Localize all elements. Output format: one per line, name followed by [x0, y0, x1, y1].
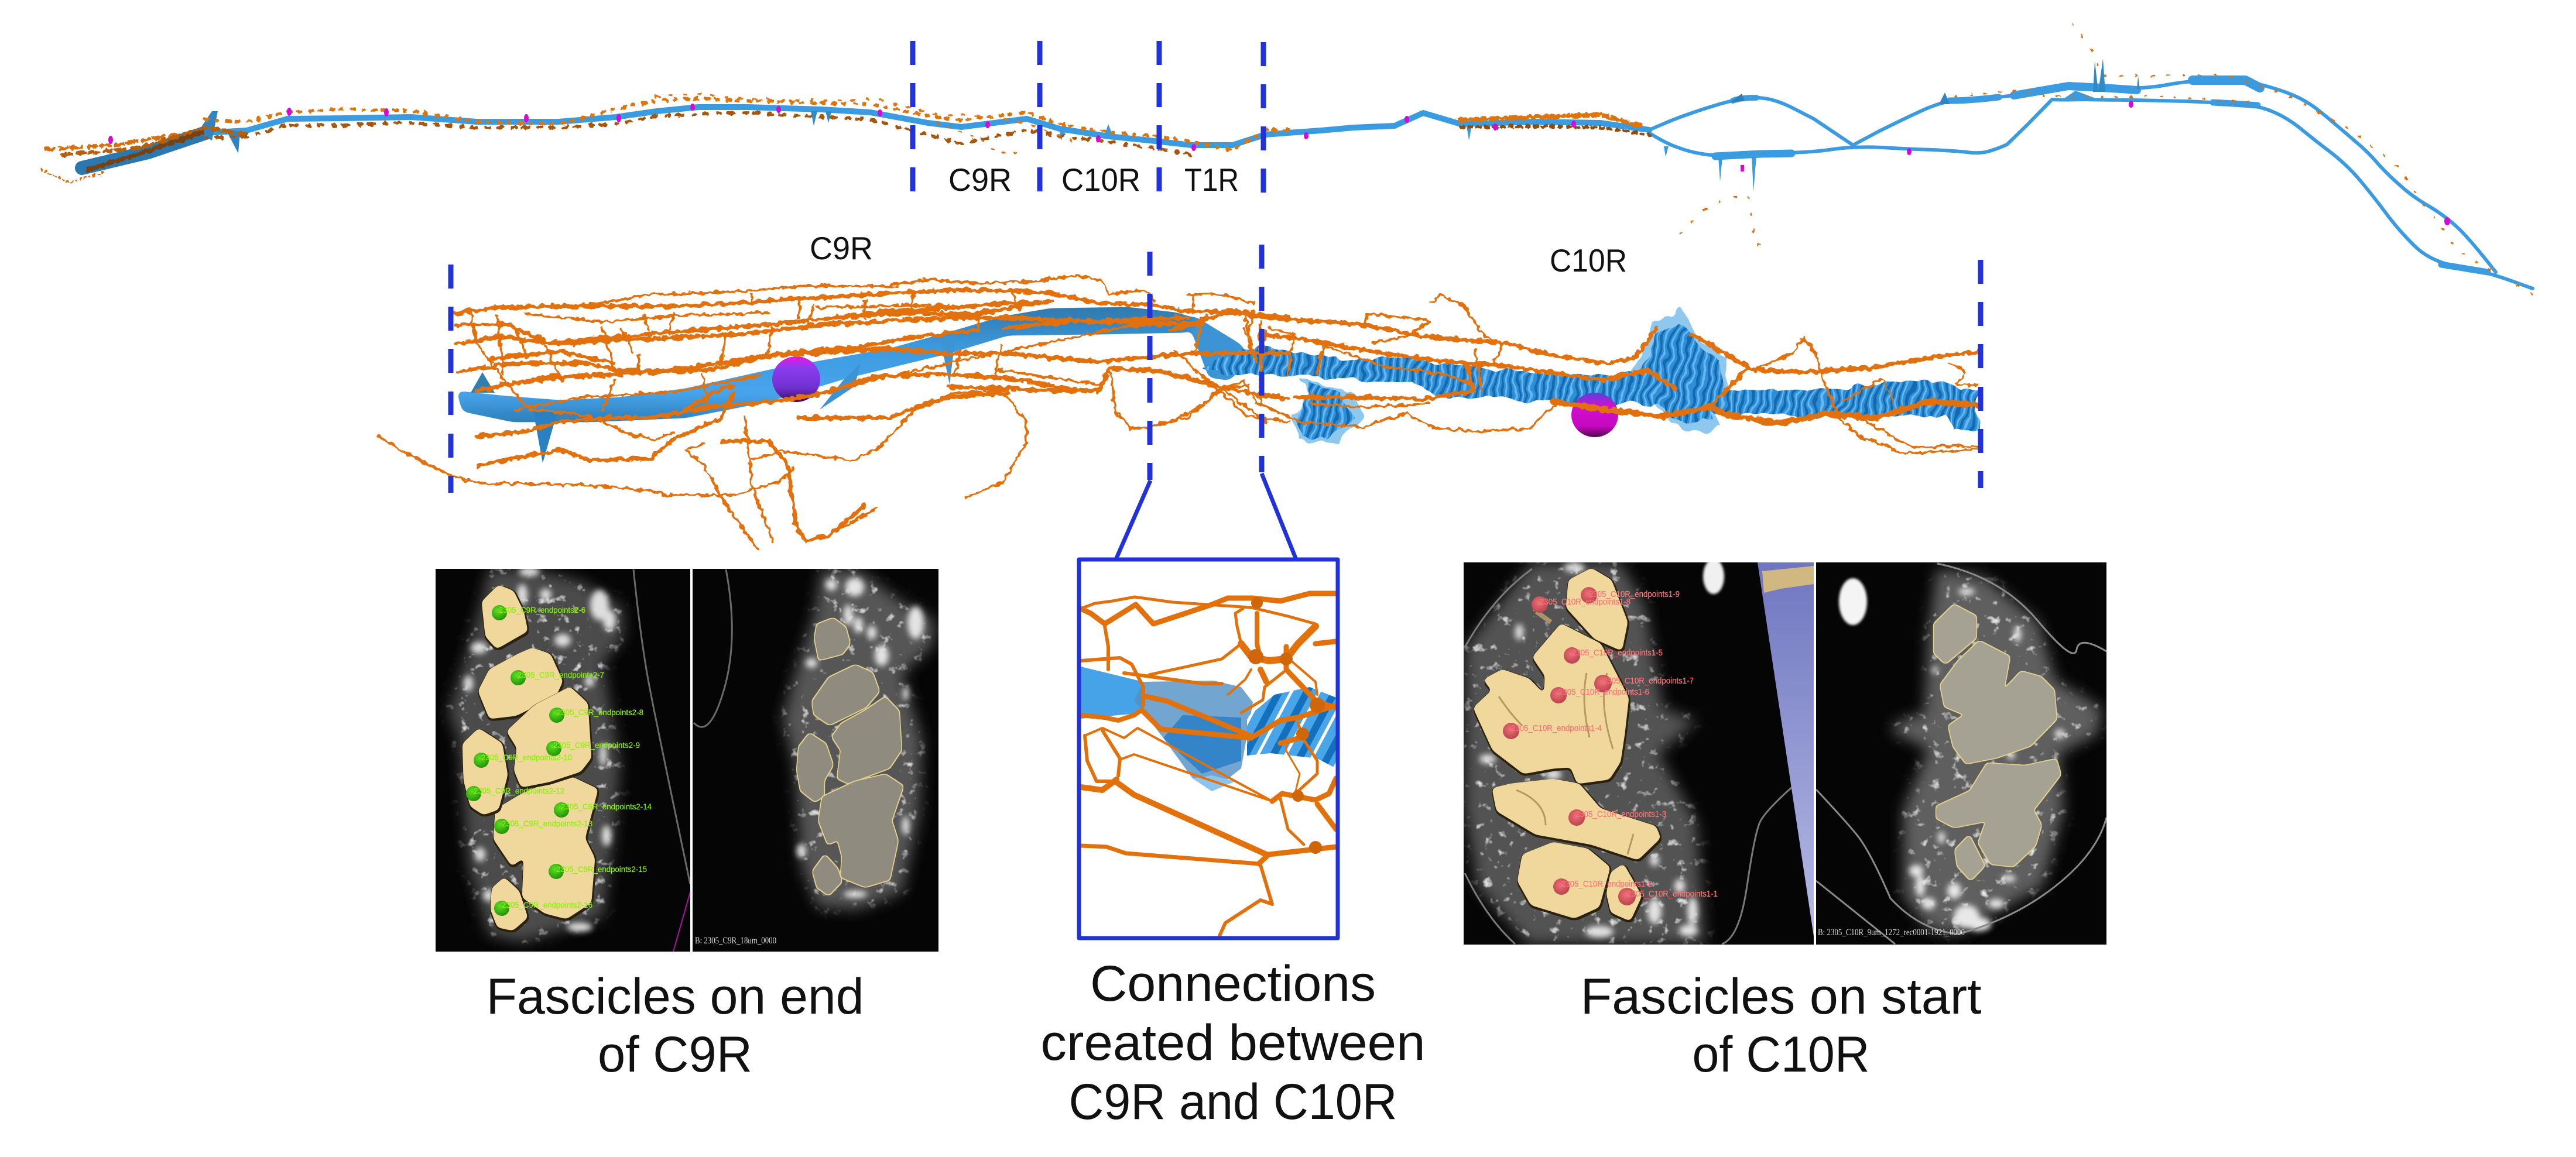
section labels: C10R [1061, 162, 1140, 198]
red endpoint spheres [1503, 587, 1636, 905]
endpoint labels: 2305_C9R_endpoints2-6 [499, 605, 585, 614]
green endpoint spheres [466, 605, 569, 916]
caption: Fascicles on start of C10R: Fascicles on start [1581, 969, 1982, 1025]
endpoint labels: 2305_C10R_endpoints1-6 [1558, 687, 1649, 697]
section labels: C9R [948, 162, 1012, 198]
section labels [948, 162, 1239, 198]
endpoint labels: 2305_C9R_endpoints2-14 [561, 802, 652, 811]
endpoint labels: 2305_C10R_endpoints1-8 [1540, 597, 1630, 607]
endpoint labels: 2305_C10R_endpoints1-2 [1561, 879, 1652, 889]
endpoint labels: 2305_C9R_endpoints2-15 [556, 864, 647, 874]
caption: connections created between C9R and C10R: Connections [1090, 956, 1376, 1012]
overview section boundary lines [913, 41, 1263, 193]
caption: Fascicles on start of C10R [1581, 969, 1982, 1083]
CT slice with C9R outlines [693, 569, 938, 952]
panel: full nerve overview [41, 23, 2535, 296]
caption: Fascicles on end of C9R [486, 969, 864, 1083]
label: C10R: C10R [1550, 242, 1627, 279]
slice caption: B: 2305_C9R_18um_0000 [695, 936, 776, 946]
C10R fascicle outlines [1935, 606, 2060, 879]
endpoint labels: 2305_C10R_endpoints1-3 [1575, 809, 1666, 819]
slicer background wedge [1758, 562, 1814, 936]
CT 3D view with C9R fascicles [436, 567, 690, 952]
zoom connector lines [1116, 473, 1296, 559]
endpoint labels: 2305_C9R_endpoints2-13 [502, 819, 592, 828]
overview nerve trace [82, 59, 2533, 289]
inset frame [1079, 559, 1338, 938]
fascicles [1475, 570, 1659, 919]
C10R axon network [1171, 295, 1978, 454]
inset blue nerve geometry [1081, 667, 1336, 791]
section labels: T1R [1184, 162, 1239, 198]
CT 3D view with C10R fascicles [1464, 559, 1814, 945]
caption: connections created between C9R and C10R: C9R and C10R [1069, 1074, 1397, 1130]
panel: C9R and C10R close-up [378, 230, 1981, 550]
inset axon connections [1081, 593, 1336, 936]
endpoint labels [474, 605, 652, 909]
node: C9R magenta sphere [772, 356, 820, 402]
caption: Fascicles on start of C10R: of C10R [1692, 1026, 1870, 1083]
endpoint labels: 2305_C9R_endpoints2-8 [557, 708, 643, 717]
endpoint labels: 2305_C10R_endpoints1-9 [1589, 589, 1680, 599]
overview axon fragments [41, 23, 2535, 296]
C9R fascicle outlines [798, 619, 902, 894]
panel: CT slices at start of C10R [1464, 559, 2106, 1083]
panel: CT slices at end of C9R [436, 567, 938, 1083]
caption: connections created between C9R and C10R: created between [1041, 1015, 1425, 1071]
caption: Fascicles on end of C9R: Fascicles on end [486, 969, 864, 1025]
label: C9R: C9R [810, 230, 873, 266]
caption: Fascicles on end of C9R: of C9R [598, 1026, 752, 1083]
endpoint labels: 2305_C10R_endpoints1-4 [1511, 723, 1602, 733]
C10R nerve tube [1204, 308, 1978, 443]
overview nodes: magenta markers [108, 101, 2450, 225]
endpoint labels: 2305_C9R_endpoints2-12 [474, 786, 564, 795]
endpoint labels: 2305_C10R_endpoints1-7 [1603, 676, 1694, 686]
endpoint labels: 2305_C9R_endpoints2-7 [518, 670, 604, 679]
close-up section boundary lines [451, 245, 1981, 493]
C9R axon network [378, 276, 1288, 550]
endpoint labels: 2305_C9R_endpoints2-9 [553, 740, 640, 750]
endpoint labels [1511, 589, 1718, 899]
fascicle fold details [1499, 612, 1633, 854]
fascicles [464, 587, 596, 929]
slice caption: B: 2305_C10R_9um_1272_rec0001-1921_0000 [1818, 928, 1965, 938]
endpoint labels: 2305_C10R_endpoints1-1 [1627, 889, 1718, 899]
panel: zoomed connections inset [1041, 559, 1425, 1130]
endpoint labels: 2305_C9R_endpoints2-10 [481, 753, 572, 762]
caption: connections created between C9R and C10R [1041, 956, 1425, 1130]
node: C10R magenta sphere [1571, 393, 1618, 437]
endpoint labels: 2305_C10R_endpoints1-5 [1572, 648, 1663, 658]
endpoint labels: 2305_C9R_endpoints2-16 [502, 900, 592, 909]
C9R nerve tube [457, 307, 1250, 463]
CT slice with C10R outlines [1816, 562, 2106, 945]
